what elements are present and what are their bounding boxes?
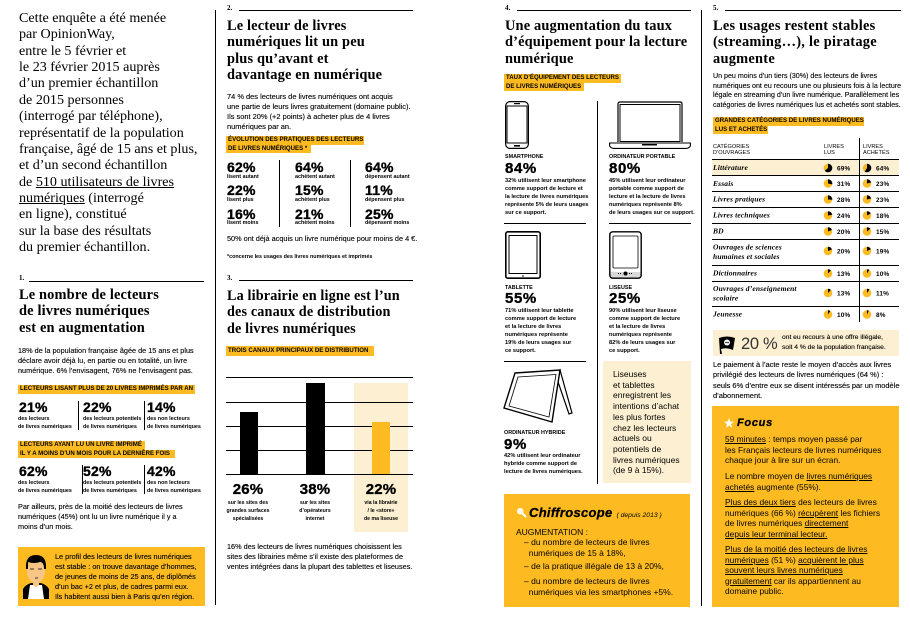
text: illegal offer [782, 333, 886, 352]
panel: Focus [712, 406, 899, 607]
label: three distribution channels: TROIS CANAUX PRINCIPAUX DE DISTRIBUTION [228, 347, 368, 354]
icon: laptop [609, 101, 691, 149]
heading: section 1: est en augmentation [19, 320, 145, 336]
device: hybrid computer: hybride comme support de [504, 461, 577, 467]
callout: illegal offer [713, 330, 899, 356]
text block: section 1 closing: Par ailleurs, près de la moitié des lecteurs de livres [18, 502, 183, 511]
list: increases: numériques de 15 à 18%, [529, 548, 626, 558]
stats: evolution of practices: 16% [227, 206, 256, 222]
device: laptop: de leurs usages sur ce support. [609, 210, 695, 216]
section number 1: 1. [19, 274, 24, 282]
callout: e-readers and tablets: enregistrent les [613, 390, 671, 400]
stats: 20+ printed books: 21% [19, 399, 48, 415]
text block: section 1 intro: numérique. 6% l’envisagent, 76% ne l’envisagent pas. [18, 366, 193, 375]
chart values and labels: grandes surfaces [227, 508, 269, 514]
text: focus facts: depuis leur terminal lecteur. [725, 528, 827, 538]
text: focus facts: Le nombre moyen de livres numériques [725, 471, 872, 481]
section number 2: 2. [227, 4, 232, 12]
text block: survey introduction: de 2015 personnes [19, 92, 124, 108]
text block: survey introduction: (interrogé par téléphone), [19, 108, 163, 124]
device: tablet: comme support de lecture [505, 316, 576, 322]
stats: evolution of practices: achètent moins [295, 220, 335, 226]
chart values and labels: internet [305, 516, 325, 522]
heading: section 2: plus qu’avant et [227, 51, 329, 67]
heading: section 3: de livres numériques [227, 321, 356, 337]
text: profile description: Ils habitent aussi bien à Paris qu’en région. [55, 592, 194, 601]
stats: 20+ printed books: de livres numériques [147, 424, 201, 430]
stats: evolution of practices [227, 159, 410, 227]
icon: reader portrait [23, 555, 49, 599]
label: categories of books: LUS ET ACHETÉS [715, 126, 767, 133]
table: categories read and bought: Jeunesse [712, 310, 743, 318]
table: categories read and bought: 10% [837, 312, 851, 319]
device: e-reader [609, 285, 680, 354]
text block: survey introduction: du premier échantillon. [19, 239, 150, 255]
callout: e-readers and tablets: (de 9 à 15%). [613, 465, 664, 475]
device: smartphone: la lecture de livres numériques [505, 194, 588, 200]
chart values and labels: 26% [233, 481, 263, 498]
device: smartphone: comme support de lecture et [505, 186, 583, 192]
chart values and labels: 22% [366, 481, 396, 498]
text block: section 3 closing: sites des librairies même s’il existe des plateformes de [227, 552, 403, 561]
stats: evolution of practices: dépensent moins [365, 220, 409, 226]
bar chart: distribution channels [226, 377, 413, 532]
text: focus facts: Plus des deux tiers des lecteurs de livres [725, 497, 877, 507]
device: hybrid computer: lecture de livres numériques. [504, 469, 583, 475]
text block: survey introduction: Cette enquête a été menée [19, 10, 166, 26]
callout: e-readers and tablets: Liseuses [613, 369, 647, 379]
chart values and labels: spécialisées [233, 516, 263, 522]
heading: section 4: d’équipement pour la lecture [505, 34, 687, 50]
text block: section 2 intro: 74 % des lecteurs de livres numériques ont acquis [227, 92, 393, 101]
label: evolution of practices [226, 135, 364, 153]
stats: evolution of practices: 11% [365, 182, 393, 198]
table: categories read and bought: LIVRES [863, 144, 883, 150]
heading: section 1: Le nombre de lecteurs [19, 287, 159, 303]
stats: evolution of practices: 25% [365, 206, 394, 222]
callout: e-readers and tablets: les plus fortes [613, 412, 665, 422]
heading: section 4: numérique [505, 51, 574, 67]
stats: printed book within a month: de livres numériques [18, 488, 72, 494]
table: categories read and bought: Livres techniques [712, 210, 770, 220]
device: hybrid computer: 42% utilisent leur ordinateur [504, 453, 580, 459]
text block: section 1 closing: numériques (45%) ont lu un livre numérique il y a [18, 512, 177, 521]
section number 4: 4. [505, 4, 510, 12]
label: readers of a printed book within a month: IL Y A MOINS D’UN MOIS POUR LA DERNIÈRE FOIS [20, 450, 170, 457]
value: 20%: 20 % [741, 335, 777, 353]
stats: printed book within a month: 42% [147, 463, 176, 479]
text: illegal offer: soit 4 % de la population française. [782, 344, 886, 351]
stats: 20+ printed books: 14% [147, 399, 176, 415]
label: equipment rate: TAUX D’ÉQUIPEMENT DES LECTEURS [506, 74, 619, 81]
text block: section 3 closing: ventes intégrées dans la plupart des tablettes et liseuses. [227, 562, 412, 571]
chart values and labels: sur les sites [300, 500, 330, 506]
text: profile description: de jeunes de moins de 25 ans, de diplômés [55, 572, 196, 581]
text block: section 1 intro: déclare avoir déjà lu, en partie ou en totalité, un livre [18, 356, 187, 365]
text block: survey introduction: d’un premier échantillon [19, 75, 158, 91]
device: e-reader: et la lecture de livres [609, 324, 665, 330]
device: hybrid computer: 9% [504, 436, 527, 453]
text block: section 2 intro: numériques par an. [227, 122, 291, 131]
text block: survey introduction: française, âgé de 15 ans et plus, [19, 141, 197, 157]
device: laptop: lecture et la lecture de livres [609, 194, 686, 200]
text: focus facts: gratuitement car ils appartiennent au [725, 576, 861, 586]
stats: evolution of practices: 62% [227, 159, 256, 175]
table: categories read and bought: 8% [876, 312, 886, 319]
text: profile description: d’un bac +2 et plus, de cadres parmi eux. [55, 582, 189, 591]
device: e-reader: numériques représente [609, 332, 672, 338]
stats: printed book within a month: de livres numériques [83, 488, 137, 494]
chart values and labels: sur les sites des [228, 500, 268, 506]
text block: section 3 closing [227, 542, 412, 571]
icon: magnifier [516, 508, 527, 518]
heading: section 5: augmente [713, 51, 775, 67]
table: categories read and bought: D’OUVRAGES [713, 150, 750, 156]
device: tablet: 55% [505, 290, 537, 307]
text block: section 5 intro: catégories de livres numériques lus et achetés sont stables. [713, 101, 901, 109]
label: evolution of practices: ÉVOLUTION DES PRATIQUES DES LECTEURS [228, 136, 363, 143]
text: focus facts: chaque jour à lire sur un écran. [725, 455, 840, 465]
table: categories read and bought: scolaire [712, 294, 739, 302]
text block: survey introduction: par OpinionWay, [19, 26, 115, 42]
text block: pay per act [713, 360, 901, 402]
text block: survey introduction [19, 10, 197, 255]
device: e-reader: ce support. [609, 348, 640, 354]
device: smartphone: sur ce support. [505, 210, 546, 216]
device: tablet: TABLETTE [505, 285, 533, 291]
device: laptop [609, 154, 695, 216]
text block: pay per act: d’abonnement. [713, 391, 762, 400]
table: categories read and bought: 18% [876, 213, 890, 220]
stats: printed book within a month: des lecteurs potentiels [83, 480, 141, 486]
heading: section 2: numériques lit un peu [227, 34, 365, 50]
stats: 20+ printed books: 22% [83, 399, 112, 415]
heading: section 1: de livres numériques [19, 303, 150, 319]
text block: section 5 intro: légale en streaming d’un livre numérique. Parallèlement les [713, 91, 899, 99]
chart values and labels: de ma liseuse [364, 516, 398, 522]
text block: section 3 closing: 16% des lecteurs de livres numériques choisissent les [227, 542, 402, 551]
table: categories read and bought: 24% [837, 213, 851, 220]
stats: evolution of practices: dépensent plus [365, 197, 405, 203]
stats: evolution of practices: 21% [295, 206, 324, 222]
table: categories read and bought: 23% [876, 197, 890, 204]
stats: printed book within a month: 52% [83, 463, 112, 479]
text: focus facts: achetés augmente (55%). [725, 482, 821, 492]
device: hybrid computer [504, 430, 583, 475]
heading: section 2: Le lecteur de livres [227, 18, 347, 34]
stats: 20+ printed books: des lecteurs [18, 416, 49, 422]
device: tablet: et la lecture de livres [505, 324, 561, 330]
table: categories read and bought: 31% [837, 181, 851, 188]
device: smartphone: 32% utilisent leur smartphone [505, 178, 586, 184]
text block: section 1 intro [18, 346, 194, 375]
callout: reader profile [18, 547, 205, 606]
text block: section 2 intro: Ils sont 20% (+2 points) à acheter plus de 4 livres [227, 112, 390, 121]
text: focus facts: 59 minutes : temps moyen passé par [725, 434, 862, 444]
text block: section 5 intro [713, 72, 901, 112]
stats: evolution of practices: lisent moins [227, 220, 258, 226]
device: tablet [505, 285, 576, 354]
text: focus facts: souvent leurs livres numériques [725, 565, 843, 575]
heading: section 5: (streaming…), le piratage [713, 34, 877, 50]
text: focus facts: de livres numériques directement [725, 518, 848, 528]
icon: hybrid computer [503, 368, 573, 423]
icon: star [724, 418, 734, 428]
heading: section 5 [713, 18, 877, 67]
stats: evolution of practices: lisent plus [227, 197, 254, 203]
device: tablet: ce support. [505, 348, 536, 354]
list: increases: AUGMENTATION : [516, 527, 588, 537]
chart values and labels: d’opérateurs [299, 508, 331, 514]
text: profile description [55, 552, 197, 601]
device: smartphone [505, 154, 588, 216]
device: smartphone: SMARTPHONE [505, 154, 543, 160]
section number 5: 5. [713, 4, 718, 12]
table: categories read and bought: 28% [837, 197, 851, 204]
device: laptop: 45% utilisent leur ordinateur [609, 178, 685, 184]
stats: evolution of practices: achètent plus [295, 197, 330, 203]
text block: section 1 closing: moins d’un mois. [18, 522, 73, 531]
stats: 20+ printed books [18, 399, 201, 430]
text: profile description: Le profil des lecteurs de livres numériques [55, 552, 192, 561]
table: categories read and bought: 20% [837, 229, 851, 236]
text block: survey introduction: numériques (interrogé [19, 190, 144, 206]
stats: evolution of practices: dépensent autant [365, 174, 410, 180]
text block: pay per act: seuls 6% d’entre eux se disent intéressés par un modèle [713, 381, 899, 390]
stats: printed book within a month: des lecteurs [18, 480, 49, 486]
list: increases: – du nombre de lecteurs de livres [524, 576, 650, 586]
stats: evolution of practices: 64% [365, 159, 394, 175]
icon: tablet [505, 231, 541, 279]
device: smartphone: 84% [505, 160, 537, 177]
table: categories read and bought: Livres pratiques [712, 194, 765, 204]
stats: 20+ printed books: des lecteurs potentiels [83, 416, 141, 422]
text block: section 2 intro [227, 92, 411, 131]
text block: survey introduction: en ligne), constitué [19, 206, 127, 222]
text block: survey introduction: entre le 5 février et [19, 43, 126, 59]
label: evolution of practices: DE LIVRES NUMÉRIQUES * [228, 145, 307, 152]
heading: section 3 [227, 288, 400, 337]
stats: printed book within a month [18, 463, 201, 494]
device: smartphone: représente 5% de leurs usages [505, 202, 588, 208]
table: categories read and bought: humaines et sociales [713, 252, 780, 261]
panel: Chiffroscope [504, 494, 690, 607]
chart values and labels: via la librairie [364, 500, 398, 506]
device: tablet: 71% utilisent leur tablette [505, 308, 574, 314]
text block: survey introduction: le 23 février 2015 auprès [19, 59, 160, 75]
text block: section 2 intro: une partie de leurs livres gratuitement (domaine public). [227, 102, 411, 111]
device: laptop: numériques représente 8% [609, 202, 682, 208]
list: increases [516, 527, 673, 596]
table: categories read and bought: BD [712, 226, 724, 236]
heading: section 3: des canaux de distribution [227, 304, 391, 320]
stats: evolution of practices: 15% [295, 182, 324, 198]
table: categories read and bought: LUS [824, 150, 835, 156]
text: cheap book note: 50% ont déjà acquis un livre numérique pour moins de 4 €. [227, 234, 417, 243]
section number 3: 3. [227, 274, 232, 282]
text block: section 5 intro: Un peu moins d’un tiers (30%) des lecteurs de livres [713, 72, 877, 80]
label: equipment rate: DE LIVRES NUMÉRIQUES [506, 83, 581, 90]
heading: section 2: davantage en numérique [227, 67, 382, 83]
table: categories read and bought: Dictionnaires [712, 268, 757, 278]
icon: smartphone [505, 101, 529, 149]
heading: section 1 [19, 287, 159, 336]
table: categories read and bought: 13% [837, 290, 851, 298]
stats: printed book within a month: des non lecteurs [147, 480, 190, 486]
text block: section 1 closing [18, 502, 183, 531]
list: increases: – du nombre de lecteurs de livres [524, 537, 650, 547]
text block: survey introduction: représentatif de la population [19, 125, 184, 141]
text: focus facts: les Français lecteurs de livres numériques [725, 444, 881, 454]
device: tablet: 19% de leurs usages sur [505, 340, 571, 346]
table: categories read and bought: Ouvrages de sciences [713, 242, 782, 252]
stats: evolution of practices: 64% [295, 159, 324, 175]
heading: section 3: La librairie en ligne est l’un [227, 288, 400, 304]
heading: Chiffroscope: Chiffroscope ( depuis 2013 ) [529, 505, 662, 520]
table: categories read and bought: 11% [876, 290, 889, 298]
label: readers of a printed book within a month: LECTEURS AYANT LU UN LIVRE IMPRIMÉ [20, 441, 142, 448]
list: increases: numériques via les smartphones +5%. [529, 586, 673, 596]
table: categories read and bought: 19% [876, 248, 890, 256]
text block: pay per act: Le paiement à l’acte reste le moyen d’accès aux livres [713, 360, 891, 369]
table: categories read and bought: 13% [837, 271, 851, 278]
stats: evolution of practices: lisent autant [227, 174, 259, 180]
table: categories read and bought [712, 138, 900, 324]
stats: evolution of practices: achètent autant [295, 174, 335, 180]
chart values and labels [226, 481, 398, 522]
callout: e-readers and tablets: potentiels de [613, 444, 661, 454]
device: e-reader: comme support de lecture [609, 316, 680, 322]
device: e-reader: 90% utilisent leur liseuse [609, 308, 677, 314]
text block: survey introduction: et d’un second échantillon [19, 157, 167, 173]
device: tablet: numériques représente [505, 332, 568, 338]
stats: printed book within a month: 62% [19, 463, 48, 479]
callout: e-readers and tablets: actuels ou [613, 433, 652, 443]
text: focus facts: numériques (51 %) acquièrent le plus [725, 554, 864, 564]
text: focus facts: Plus de la moitié des lecteurs de livres [725, 544, 867, 554]
label: equipment rate [504, 73, 621, 91]
stats: 20+ printed books: de livres numériques [18, 424, 72, 430]
chart values and labels: / le «store» [367, 508, 395, 514]
heading: section 4 [505, 18, 687, 67]
callout: e-readers and tablets: chez les lecteurs [613, 423, 676, 433]
callout: e-readers and tablets: intentions d’achat [613, 401, 679, 411]
text: focus facts: domaine public. [725, 586, 784, 596]
device: laptop: portable comme support de [609, 186, 684, 192]
device: e-reader: LISEUSE [609, 285, 632, 291]
device: laptop: 80% [609, 160, 641, 177]
table: categories read and bought: 64% [876, 166, 890, 172]
text block: pay per act: privilégié des lecteurs de livres numériques (64 %) : [713, 370, 883, 379]
heading: Focus: Focus [737, 417, 773, 429]
table: categories read and bought: ACHETÉS [863, 149, 890, 156]
callout: e-readers and tablets: et tablettes [613, 380, 655, 390]
text block: section 5 intro: numériques ont eu recours une ou plusieurs fois à la lecture [713, 82, 901, 90]
table: categories read and bought: Essais [712, 179, 734, 188]
text block: survey introduction: de 510 utilisateurs de livres [19, 174, 174, 190]
text: focus facts: numériques (66 %) récupèrent les fichiers [725, 508, 880, 518]
stats: 20+ printed books: des non lecteurs [147, 416, 190, 422]
icon: pirate flag [718, 336, 736, 354]
stats: evolution of practices: 22% [227, 182, 256, 198]
table: categories read and bought: Littérature [712, 163, 749, 172]
label: readers of 20+ printed books: LECTEURS LISANT PLUS DE 20 LIVRES IMPRIMÉS PAR AN [20, 385, 193, 392]
text block: section 1 intro: 18% de la population française âgée de 15 ans et plus [18, 346, 194, 355]
chart values and labels: 38% [300, 481, 330, 498]
text: illegal offer: ont eu recours à une offre illégale, [782, 334, 883, 341]
device: e-reader: 25% [609, 290, 641, 307]
list: increases: – de la pratique illégale de 13 à 20%, [524, 561, 664, 571]
heading: section 5: Les usages restent stables [713, 18, 876, 34]
table: categories read and bought: 23% [876, 181, 890, 188]
text: focus facts [725, 434, 895, 599]
icon: e-reader [609, 231, 642, 279]
table: categories read and bought: 69% [837, 166, 851, 172]
label: readers of a printed book within a month [18, 440, 175, 458]
label: categories of books [713, 117, 864, 134]
heading: section 4: Une augmentation du taux [505, 18, 672, 34]
stats: printed book within a month: de livres numériques [147, 488, 201, 494]
callout: e-readers and tablets: livres numériques [613, 455, 680, 465]
device: e-reader: 82% de leurs usages sur [609, 340, 675, 346]
device: hybrid computer: ORDINATEUR HYBRIDE [504, 430, 565, 436]
stats: 20+ printed books: de livres numériques [83, 424, 137, 430]
device: laptop: ORDINATEUR PORTABLE [609, 154, 675, 160]
table: categories read and bought: 10% [876, 271, 890, 278]
text: profile description: est stable : on trouve davantage d’hommes, [55, 562, 197, 571]
heading: section 2 [227, 18, 382, 83]
table: categories read and bought: 20% [837, 248, 851, 256]
text block: survey introduction: sur la base des résultats [19, 223, 151, 239]
table: categories read and bought: CATÉGORIES [713, 143, 750, 150]
label: categories of books: GRANDES CATÉGORIES DE LIVRES NUMÉRIQUES [715, 117, 864, 124]
callout: e-readers and tablets [603, 361, 691, 483]
table: categories read and bought: Ouvrages d’enseignement [713, 284, 797, 293]
table: categories read and bought: 15% [876, 229, 890, 236]
footnote: *concerne les usages des livres numériques et imprimés [227, 254, 372, 260]
table: categories read and bought: LIVRES [824, 144, 844, 150]
